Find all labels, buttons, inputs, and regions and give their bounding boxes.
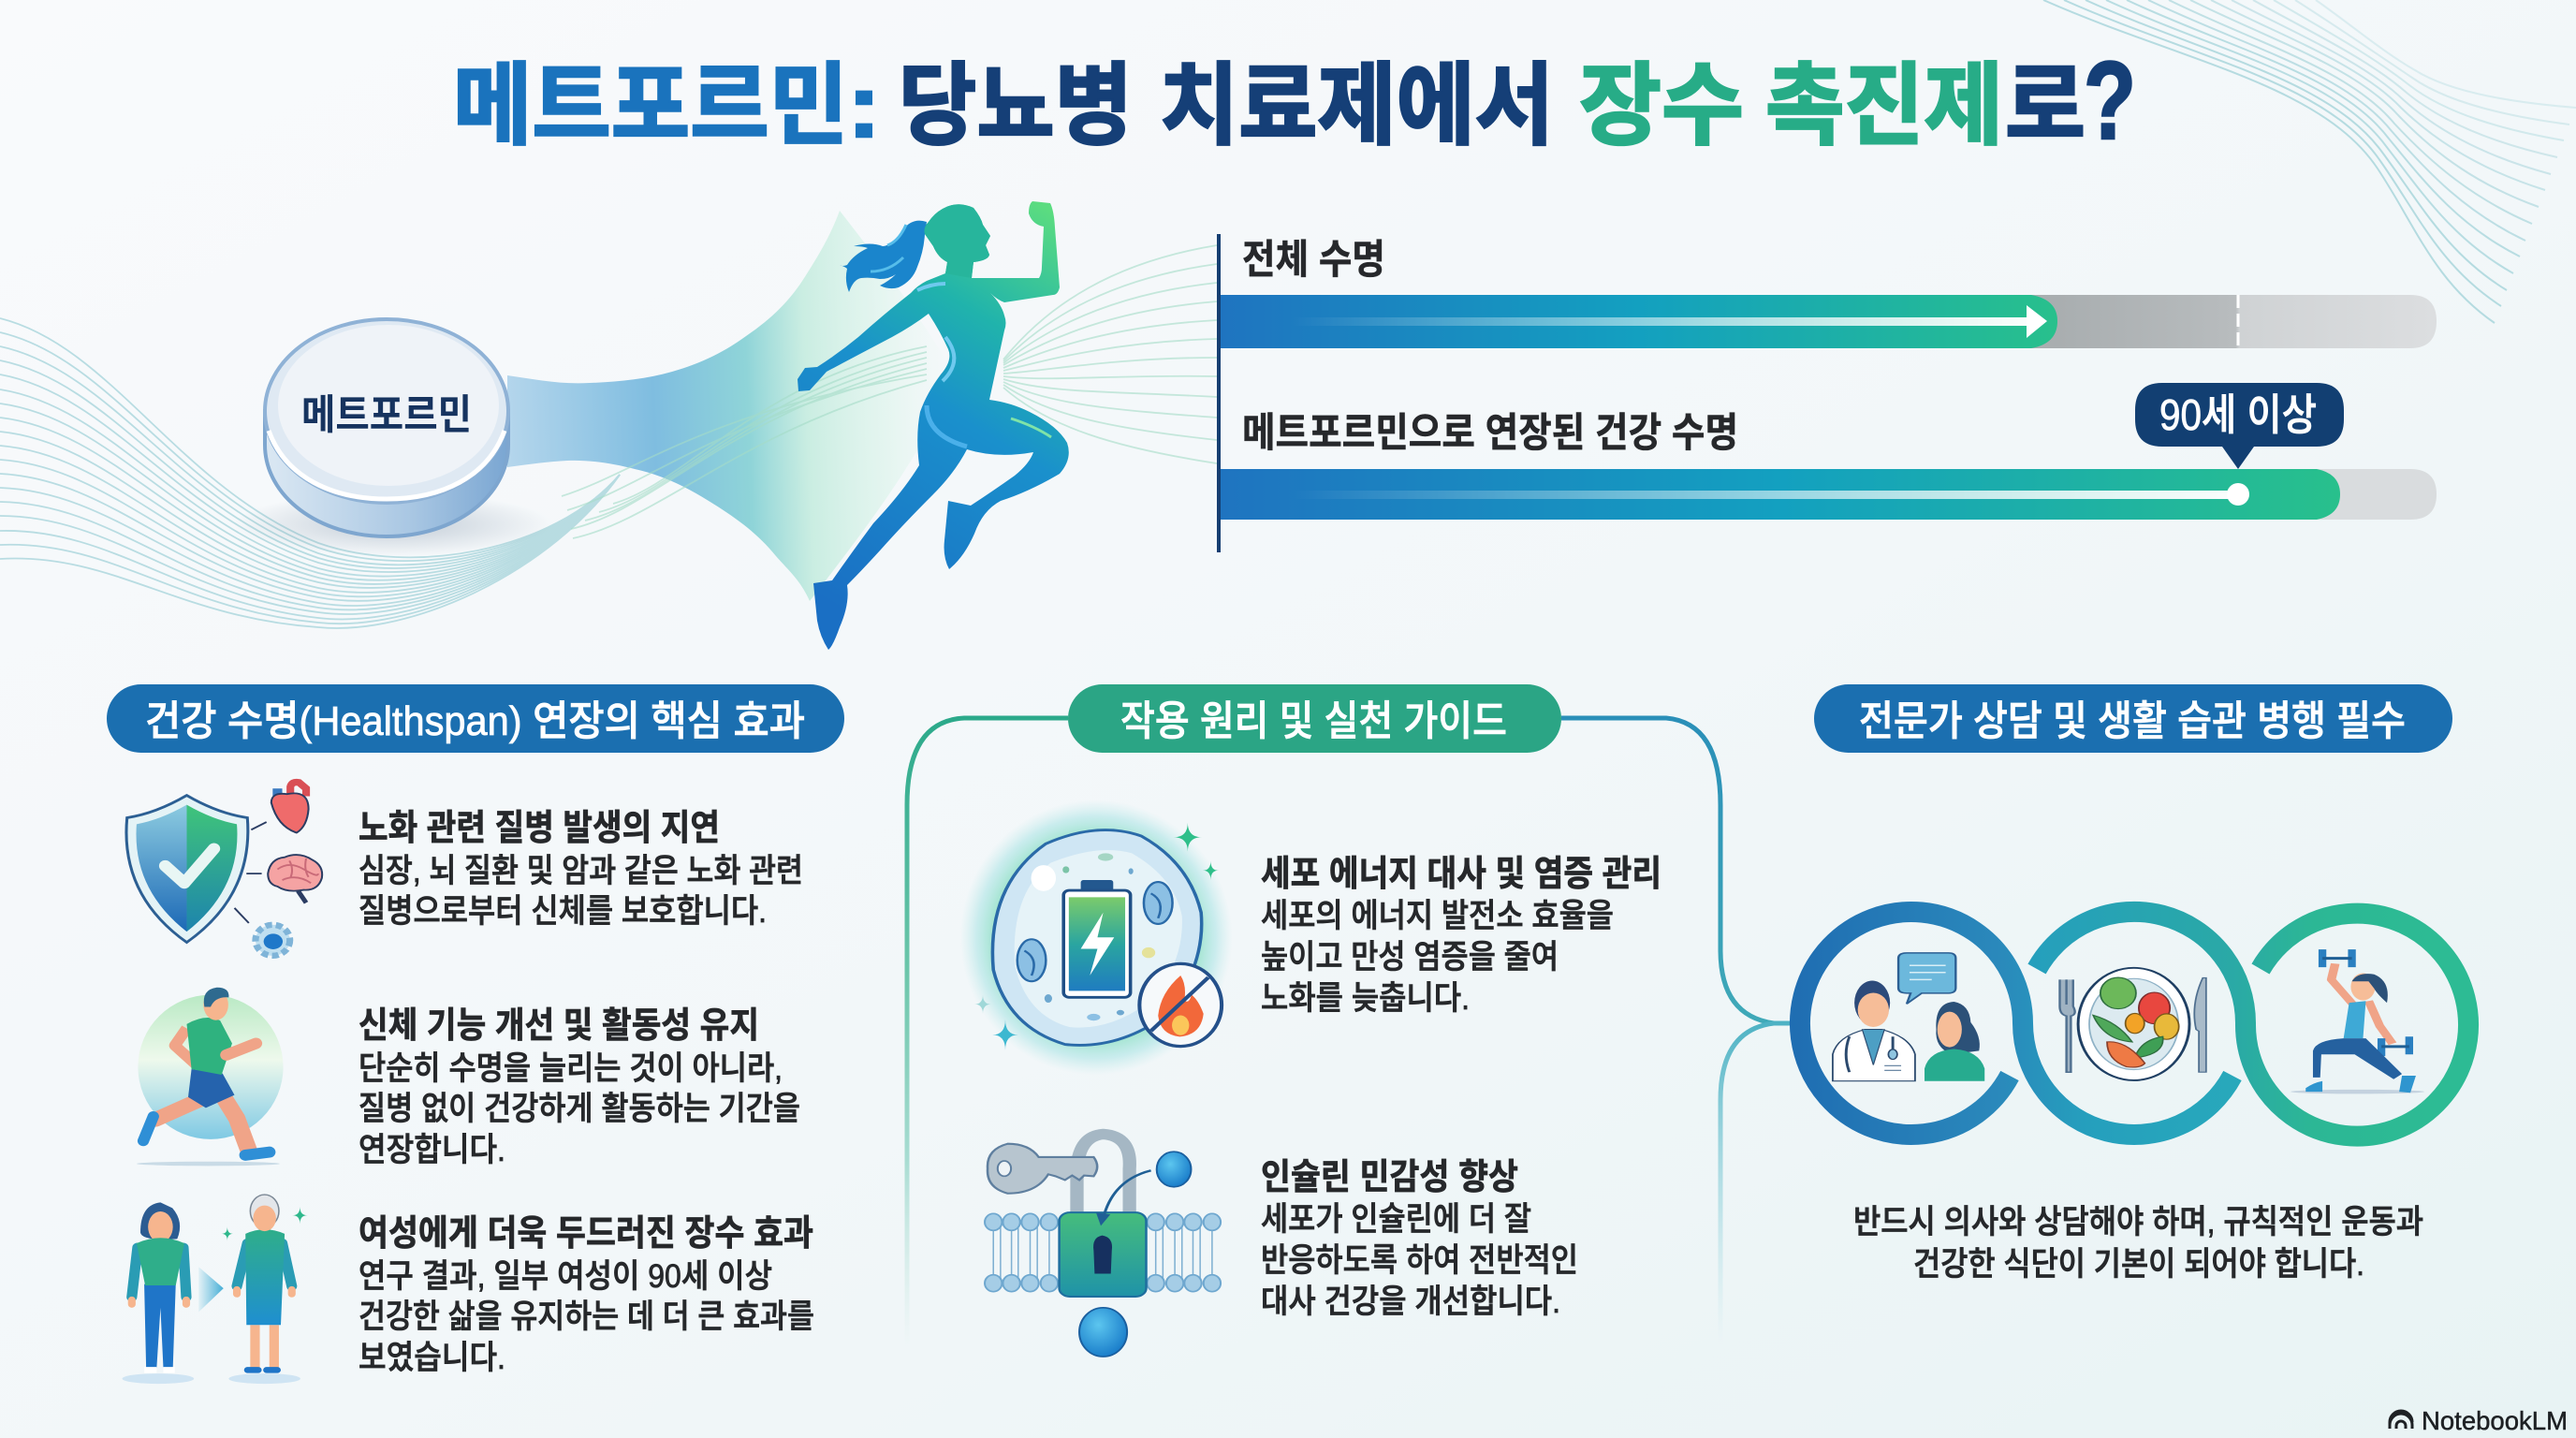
runner silhouette: [798, 201, 1069, 650]
callout: 90+: 90세 이상: [2159, 390, 2317, 439]
icon: woman exercising: [2291, 949, 2424, 1093]
life bars chart: [1217, 234, 2437, 552]
background wave lines: around runner: [562, 245, 1217, 538]
icon: key, lock and cell membrane: [985, 1134, 1221, 1357]
bar: healthspan: [1221, 469, 2437, 520]
panel: core effects: [123, 783, 814, 1384]
text: insulin sensitivity: 대사 건강을 개선합니다.: [1261, 1284, 1560, 1320]
text: longevity effect in women: [359, 1258, 814, 1376]
text: cell energy and inflammation: 세포의 에너지 발전소 효율을: [1261, 898, 1614, 934]
text: improved physical function: 연장합니다.: [359, 1132, 505, 1168]
text: cell energy and inflammation: 노화를 늦춥니다.: [1261, 980, 1470, 1017]
heading: improved physical function: 신체 기능 개선 및 활동성 유지: [359, 1006, 759, 1046]
text: longevity effect in women: 건강한 삶을 유지하는 데 더 큰 효과를: [359, 1299, 814, 1335]
text: consult doctor advice: [1853, 1204, 2423, 1283]
heading: delay of aging diseases: 노화 관련 질병 발생의 지연: [359, 809, 720, 848]
text: consult doctor advice: 반드시 의사와 상담해야 하며, 규칙적인 운동과: [1853, 1204, 2423, 1240]
text: insulin sensitivity: [1261, 1201, 1578, 1320]
bar: total lifespan: [1221, 295, 2437, 348]
section header: mechanism guide: [1068, 684, 1561, 753]
label: healthspan extended by metformin: 메트포르민으로 연장된 건강 수명: [1242, 411, 1738, 456]
pill icon labelled metformin: [234, 319, 552, 556]
title: 로: [2005, 56, 2086, 156]
icon: shield with organs: [126, 783, 322, 956]
title: 메트포르민: [453, 56, 848, 156]
section header: mechanism guide: 작용 원리 및 실천 가이드: [1120, 698, 1507, 744]
text: cell energy and inflammation: 높이고 만성 염증을 줄여: [1261, 939, 1559, 976]
icon: healthy plate: [2059, 968, 2206, 1080]
text: insulin sensitivity: 반응하도록 하여 전반적인: [1261, 1242, 1578, 1279]
label: total lifespan: 전체 수명: [1242, 238, 1385, 283]
text: longevity effect in women: 보였습니다.: [359, 1340, 505, 1376]
panel: mechanism and guide: [960, 800, 1661, 1357]
text: delay of aging diseases: [359, 853, 803, 930]
connector: right of center panel: [1561, 718, 1790, 1344]
text: improved physical function: [359, 1050, 800, 1168]
text: longevity effect in women: 연구 결과, 일부 여성이 90세 이상: [359, 1258, 772, 1295]
title: 치료제에서: [1160, 56, 1554, 156]
title: :: [847, 56, 881, 156]
title: 당뇨병: [899, 56, 1133, 156]
callout: 90+: [2135, 383, 2344, 469]
connector: left of center panel: [907, 718, 1068, 1348]
bar axis: [1217, 234, 1221, 552]
icon: cell with battery: [960, 800, 1232, 1075]
icon: doctor and patient: [1833, 953, 1984, 1081]
energy beam from pill to runner: [507, 211, 955, 601]
text: improved physical function: 단순히 수명을 늘리는 것이 아니라,: [359, 1050, 783, 1087]
section header: expert consultation: [1814, 684, 2452, 753]
text: consult doctor advice: 건강한 식단이 기본이 되어야 합니다.: [1913, 1246, 2364, 1283]
text: delay of aging diseases: 심장, 뇌 질환 및 암과 같은 노화 관련: [359, 853, 803, 889]
heading: cell energy and inflammation: 세포 에너지 대사 및 염증 관리: [1261, 855, 1661, 894]
title: ?: [2084, 39, 2136, 163]
title: 촉진제: [1765, 56, 2003, 156]
text: improved physical function: 질병 없이 건강하게 활동하는 기간을: [359, 1091, 800, 1127]
background wave lines: top right: [2043, 0, 2576, 323]
section header: healthspan effects: [107, 684, 844, 753]
NotebookLM logo: NotebookLM: [2422, 1406, 2568, 1435]
background wave lines: left: [0, 318, 620, 628]
pill label: 메트포르민: [301, 392, 472, 438]
icon: running man: [137, 988, 284, 1166]
title: [453, 39, 2136, 163]
section header: healthspan effects: 건강 수명(Healthspan) 연장의 핵심 효과: [145, 698, 805, 744]
title: 장수: [1579, 56, 1744, 156]
panel: expert consultation and lifestyle: [1800, 912, 2468, 1283]
section header: expert consultation: 전문가 상담 및 생활 습관 병행 필수: [1859, 698, 2406, 744]
text: cell energy and inflammation: [1261, 898, 1614, 1017]
icon: women aging healthily: [123, 1195, 308, 1384]
heading: longevity effect in women: 여성에게 더욱 두드러진 장수 효과: [359, 1214, 813, 1254]
linked rings: [1800, 912, 2468, 1137]
text: insulin sensitivity: 세포가 인슐린에 더 잘: [1261, 1201, 1531, 1238]
text: delay of aging diseases: 질병으로부터 신체를 보호합니다.: [359, 893, 767, 930]
heading: insulin sensitivity: 인슐린 민감성 향상: [1261, 1158, 1518, 1197]
